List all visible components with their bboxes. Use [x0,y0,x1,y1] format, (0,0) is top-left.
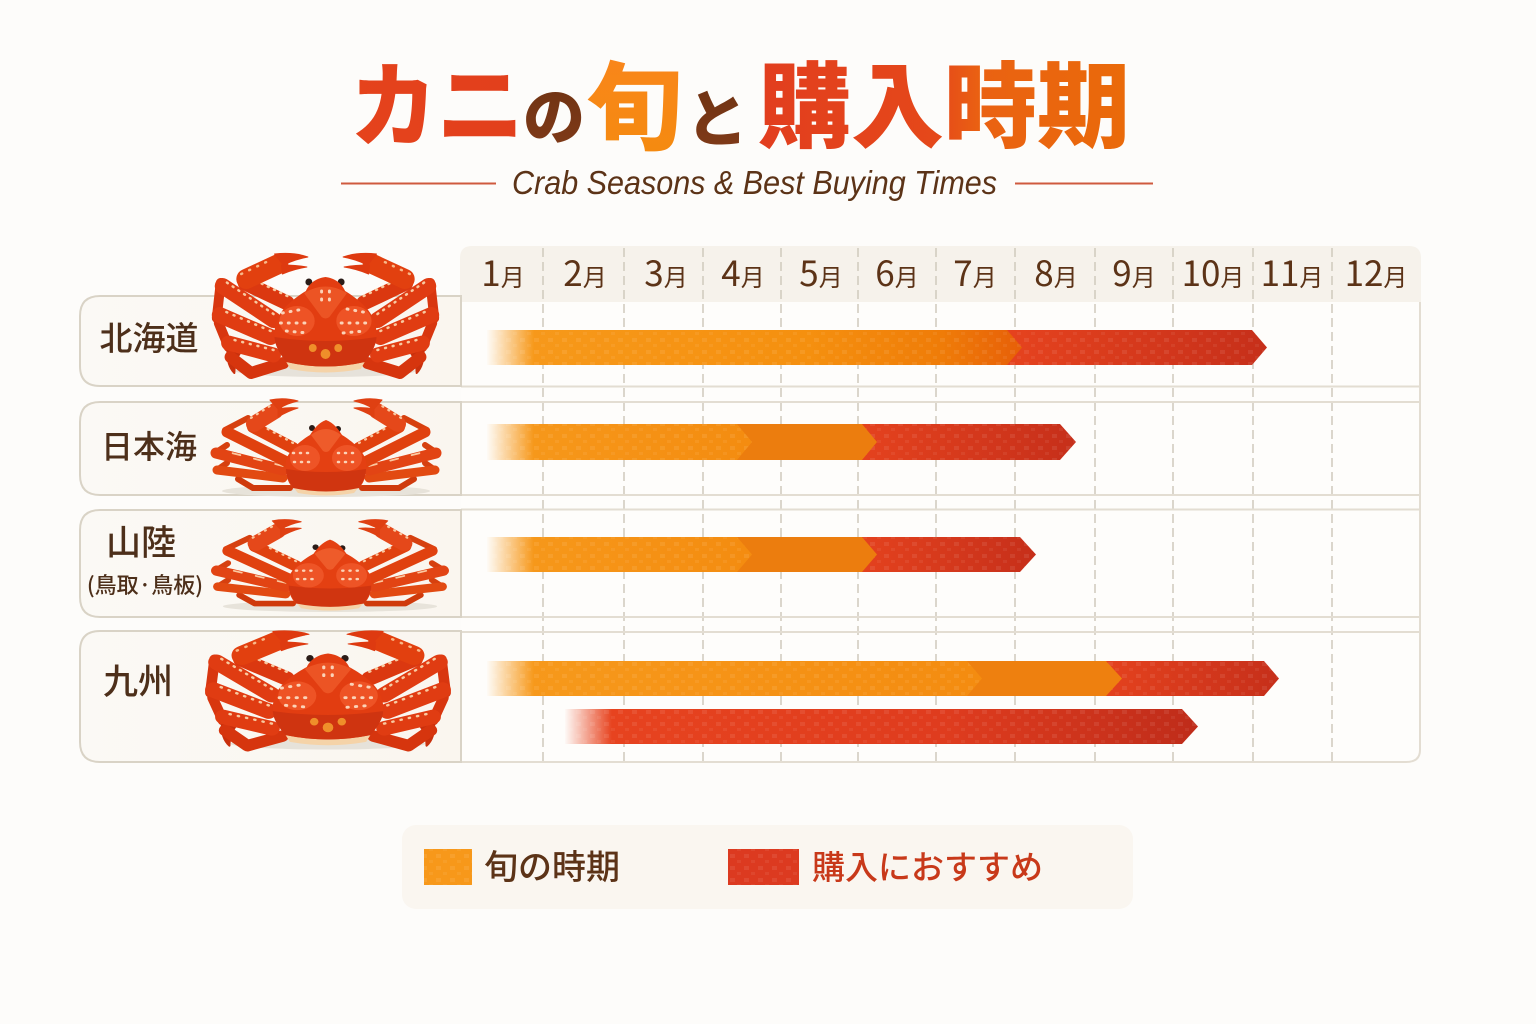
title: と [686,69,748,159]
icon: crab 日本海 [215,399,437,497]
title: の [523,67,585,157]
title [350,31,1130,170]
chart grid [460,246,1421,762]
subtitle: Crab Seasons & Best Buying Times [512,164,997,201]
legend swatch: 旬の時期 [424,849,472,885]
row: 日本海 [80,399,1076,497]
label: 山陰: 山陸 [106,515,176,566]
panel: 山陰 [80,510,461,617]
row: 九州 [80,631,1279,762]
bar: 旬の時期 山陰 [486,536,877,573]
month header: 5月 [799,246,843,297]
title: 購入時期 [758,32,1130,167]
bar: 購入におすすめ 九州 下段 [564,708,1198,745]
bar: 旬の時期 日本海 [486,423,877,461]
label: 山陰: (鳥取·鳥板) [87,568,203,600]
month header: 3月 [644,246,688,297]
month header: 8月 [1034,246,1078,297]
panel: 日本海 [80,402,461,495]
legend [402,825,1133,909]
legend label: 旬の時期: 旬の時期 [484,840,620,889]
panel: 北海道 [80,296,461,386]
month header: 1月 [481,246,525,297]
row: 北海道 [80,253,1267,386]
row: 山陰 [80,510,1036,617]
label: 九州: 九州 [103,654,173,705]
bar: 購入におすすめ 北海道 [1005,330,1267,365]
bar: 旬の時期 九州 [486,660,1122,697]
label: 山陰 [87,515,203,600]
bar: 購入におすすめ 日本海 [850,424,1076,460]
label: 日本海: 日本海 [101,422,197,468]
month header: 6月 [875,246,919,297]
label: 北海道: 北海道 [100,312,198,360]
title: 旬 [586,31,682,170]
bar: 旬の時期 北海道 [486,329,1022,366]
month header [460,246,1421,302]
bar: 購入におすすめ 山陰 [850,537,1036,572]
month header: 2月 [563,246,607,297]
month header: 12月 [1345,246,1407,297]
month header: 4月 [721,246,765,297]
legend swatch: 購入におすすめ [728,849,799,885]
month header: 7月 [953,246,997,297]
month header: 10月 [1182,246,1244,297]
month header: 9月 [1112,246,1156,297]
bar: 購入におすすめ 九州 上段 [1095,661,1279,696]
legend label: 購入におすすめ: 購入におすすめ [812,841,1043,889]
icon: crab 山陰 [216,520,444,612]
icon: crab 北海道 [217,253,434,377]
month header: 11月 [1261,246,1323,297]
panel: 九州 [80,631,461,762]
title: カニ [350,33,524,166]
icon: crab 九州 [210,631,446,750]
